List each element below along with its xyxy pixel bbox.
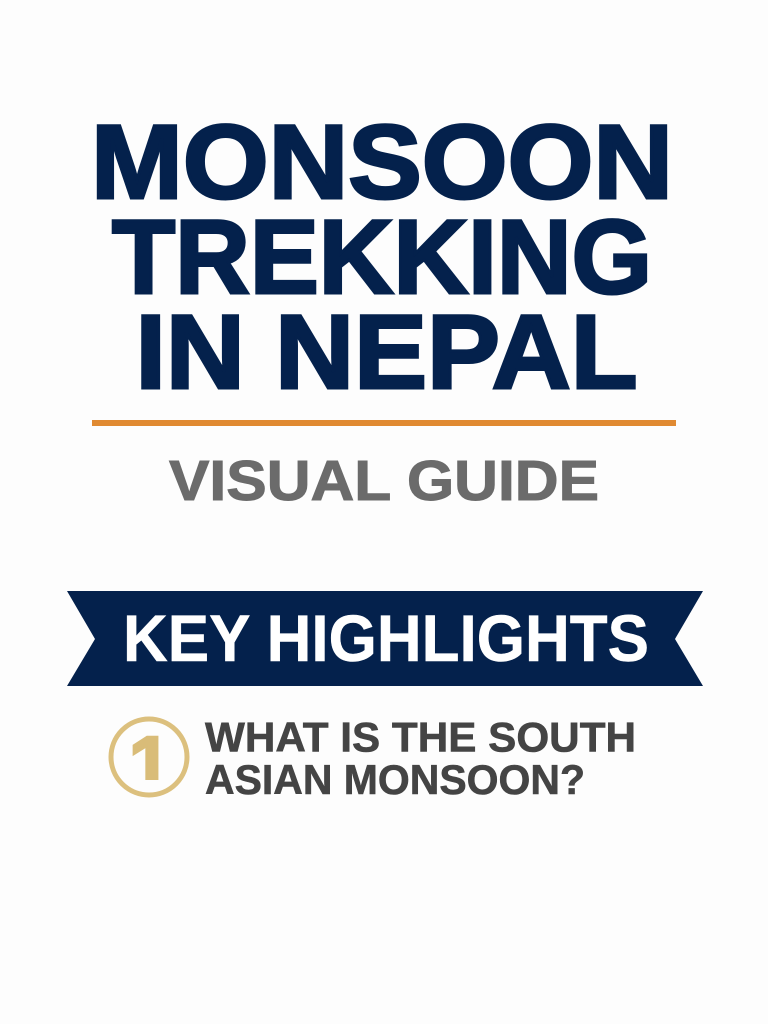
- icon: number 1 badge: [111, 719, 187, 807]
- banner: key highlights: [67, 591, 703, 686]
- banner: key highlights: KEY HIGHLIGHTS: [123, 601, 649, 675]
- title: [91, 104, 673, 411]
- orange divider: [92, 420, 676, 426]
- title: TREKKING: [112, 199, 652, 316]
- icon: number 1 badge: 1: [129, 721, 171, 807]
- highlight text: [205, 714, 636, 803]
- highlight text: ASIAN MONSOON?: [205, 756, 585, 803]
- highlight text: WHAT IS THE SOUTH: [205, 714, 636, 760]
- title: IN NEPAL: [136, 294, 638, 411]
- title: MONSOON: [91, 104, 673, 221]
- subtitle: VISUAL GUIDE: [169, 449, 599, 513]
- infographic canvas: [67, 123, 703, 798]
